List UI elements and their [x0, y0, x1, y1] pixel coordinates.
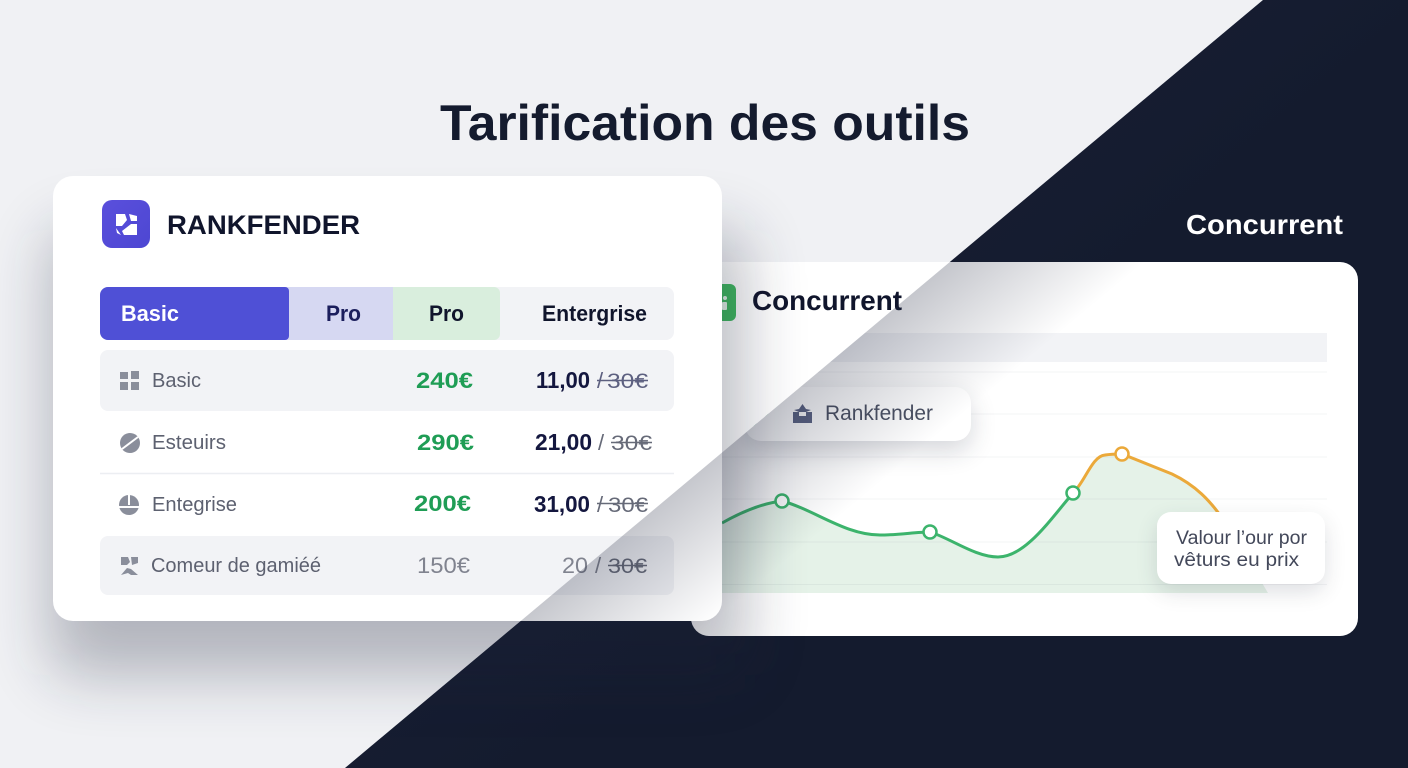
chart line: green: [722, 493, 1073, 557]
icon: clover: [121, 557, 138, 575]
row: Comeur de gamiéé: [100, 536, 674, 595]
icon: ball: [120, 433, 140, 453]
lavender tab: [285, 287, 393, 340]
row: Esteuirs: /: [598, 430, 605, 455]
icon: Rankfender logo: [102, 200, 150, 248]
panel: competitor card: [691, 262, 1358, 636]
data point: [1116, 448, 1128, 460]
row: Entegrise: 200€: [414, 491, 471, 516]
table header: [100, 287, 674, 340]
icon: box: [793, 404, 812, 423]
icon: grid: [120, 371, 139, 390]
row: Basic: 11,00: [536, 367, 590, 393]
active tab: [100, 287, 289, 340]
row: Esteuirs: [120, 429, 652, 455]
row: Comeur de gamiéé: 30€: [608, 555, 647, 578]
chart line: orange: [1076, 452, 1220, 512]
row: Basic: 30€: [607, 370, 648, 393]
row: Entegrise: Entegrise: [152, 494, 237, 516]
diagonal fold shadow: [345, 0, 1408, 768]
pricing card shadow: [50, 230, 745, 675]
legend marker: [754, 414, 768, 426]
pricing card background: [53, 176, 722, 621]
table header: Entergrise: [542, 301, 647, 326]
row: Entegrise: /: [597, 492, 604, 517]
panel: Rankfender pricing card: [53, 176, 722, 621]
data point: [924, 526, 936, 538]
row: Entegrise: 30€: [608, 494, 648, 517]
legend label: Rankfender: [825, 402, 933, 425]
row: Basic: Basic: [152, 370, 201, 392]
chart filled area: [722, 454, 1268, 593]
row: Esteuirs: 21,00: [535, 429, 592, 455]
row: Basic: /: [597, 368, 604, 393]
competitor card background: [691, 262, 1358, 636]
data point: [776, 494, 788, 508]
title: Tarification des outils: [440, 95, 970, 151]
legend pill: Rankfender: [745, 387, 971, 451]
row: Esteuirs: Esteuirs: [152, 432, 226, 454]
row: Entegrise: 31,00: [534, 491, 590, 517]
brand name: RANKFENDER: [167, 210, 360, 240]
row: Comeur de gamiéé: 150€: [417, 553, 470, 578]
background: dark diagonal panel: [345, 0, 1408, 768]
callout: value for money: [1157, 512, 1325, 592]
chart area: [722, 333, 1327, 593]
table header: Basic: [121, 301, 179, 326]
row: Esteuirs: 290€: [417, 430, 474, 455]
icon: globe: [119, 495, 139, 515]
row: Esteuirs: 30€: [611, 432, 652, 455]
competitor heading: Concurrent: [1186, 209, 1343, 240]
row: Basic: 240€: [416, 368, 473, 393]
row: Entegrise: [119, 491, 648, 517]
chart header band: [831, 333, 1327, 362]
icon: competitor logo: [706, 284, 736, 321]
competitor card name: Concurrent: [752, 285, 902, 316]
row: Comeur de gamiéé: Comeur de gamiéé: [151, 555, 321, 577]
callout: value for money: vêturs eu prix: [1174, 550, 1300, 571]
row: Comeur de gamiéé: 20: [562, 553, 588, 578]
row: Basic: [100, 350, 674, 411]
green tab: [393, 287, 500, 340]
callout: value for money: Valour l’our por: [1176, 528, 1308, 549]
data point: [1066, 486, 1080, 500]
row: Comeur de gamiéé: /: [595, 553, 602, 578]
table header: Pro: [429, 301, 464, 326]
table header: Pro: [326, 301, 361, 326]
